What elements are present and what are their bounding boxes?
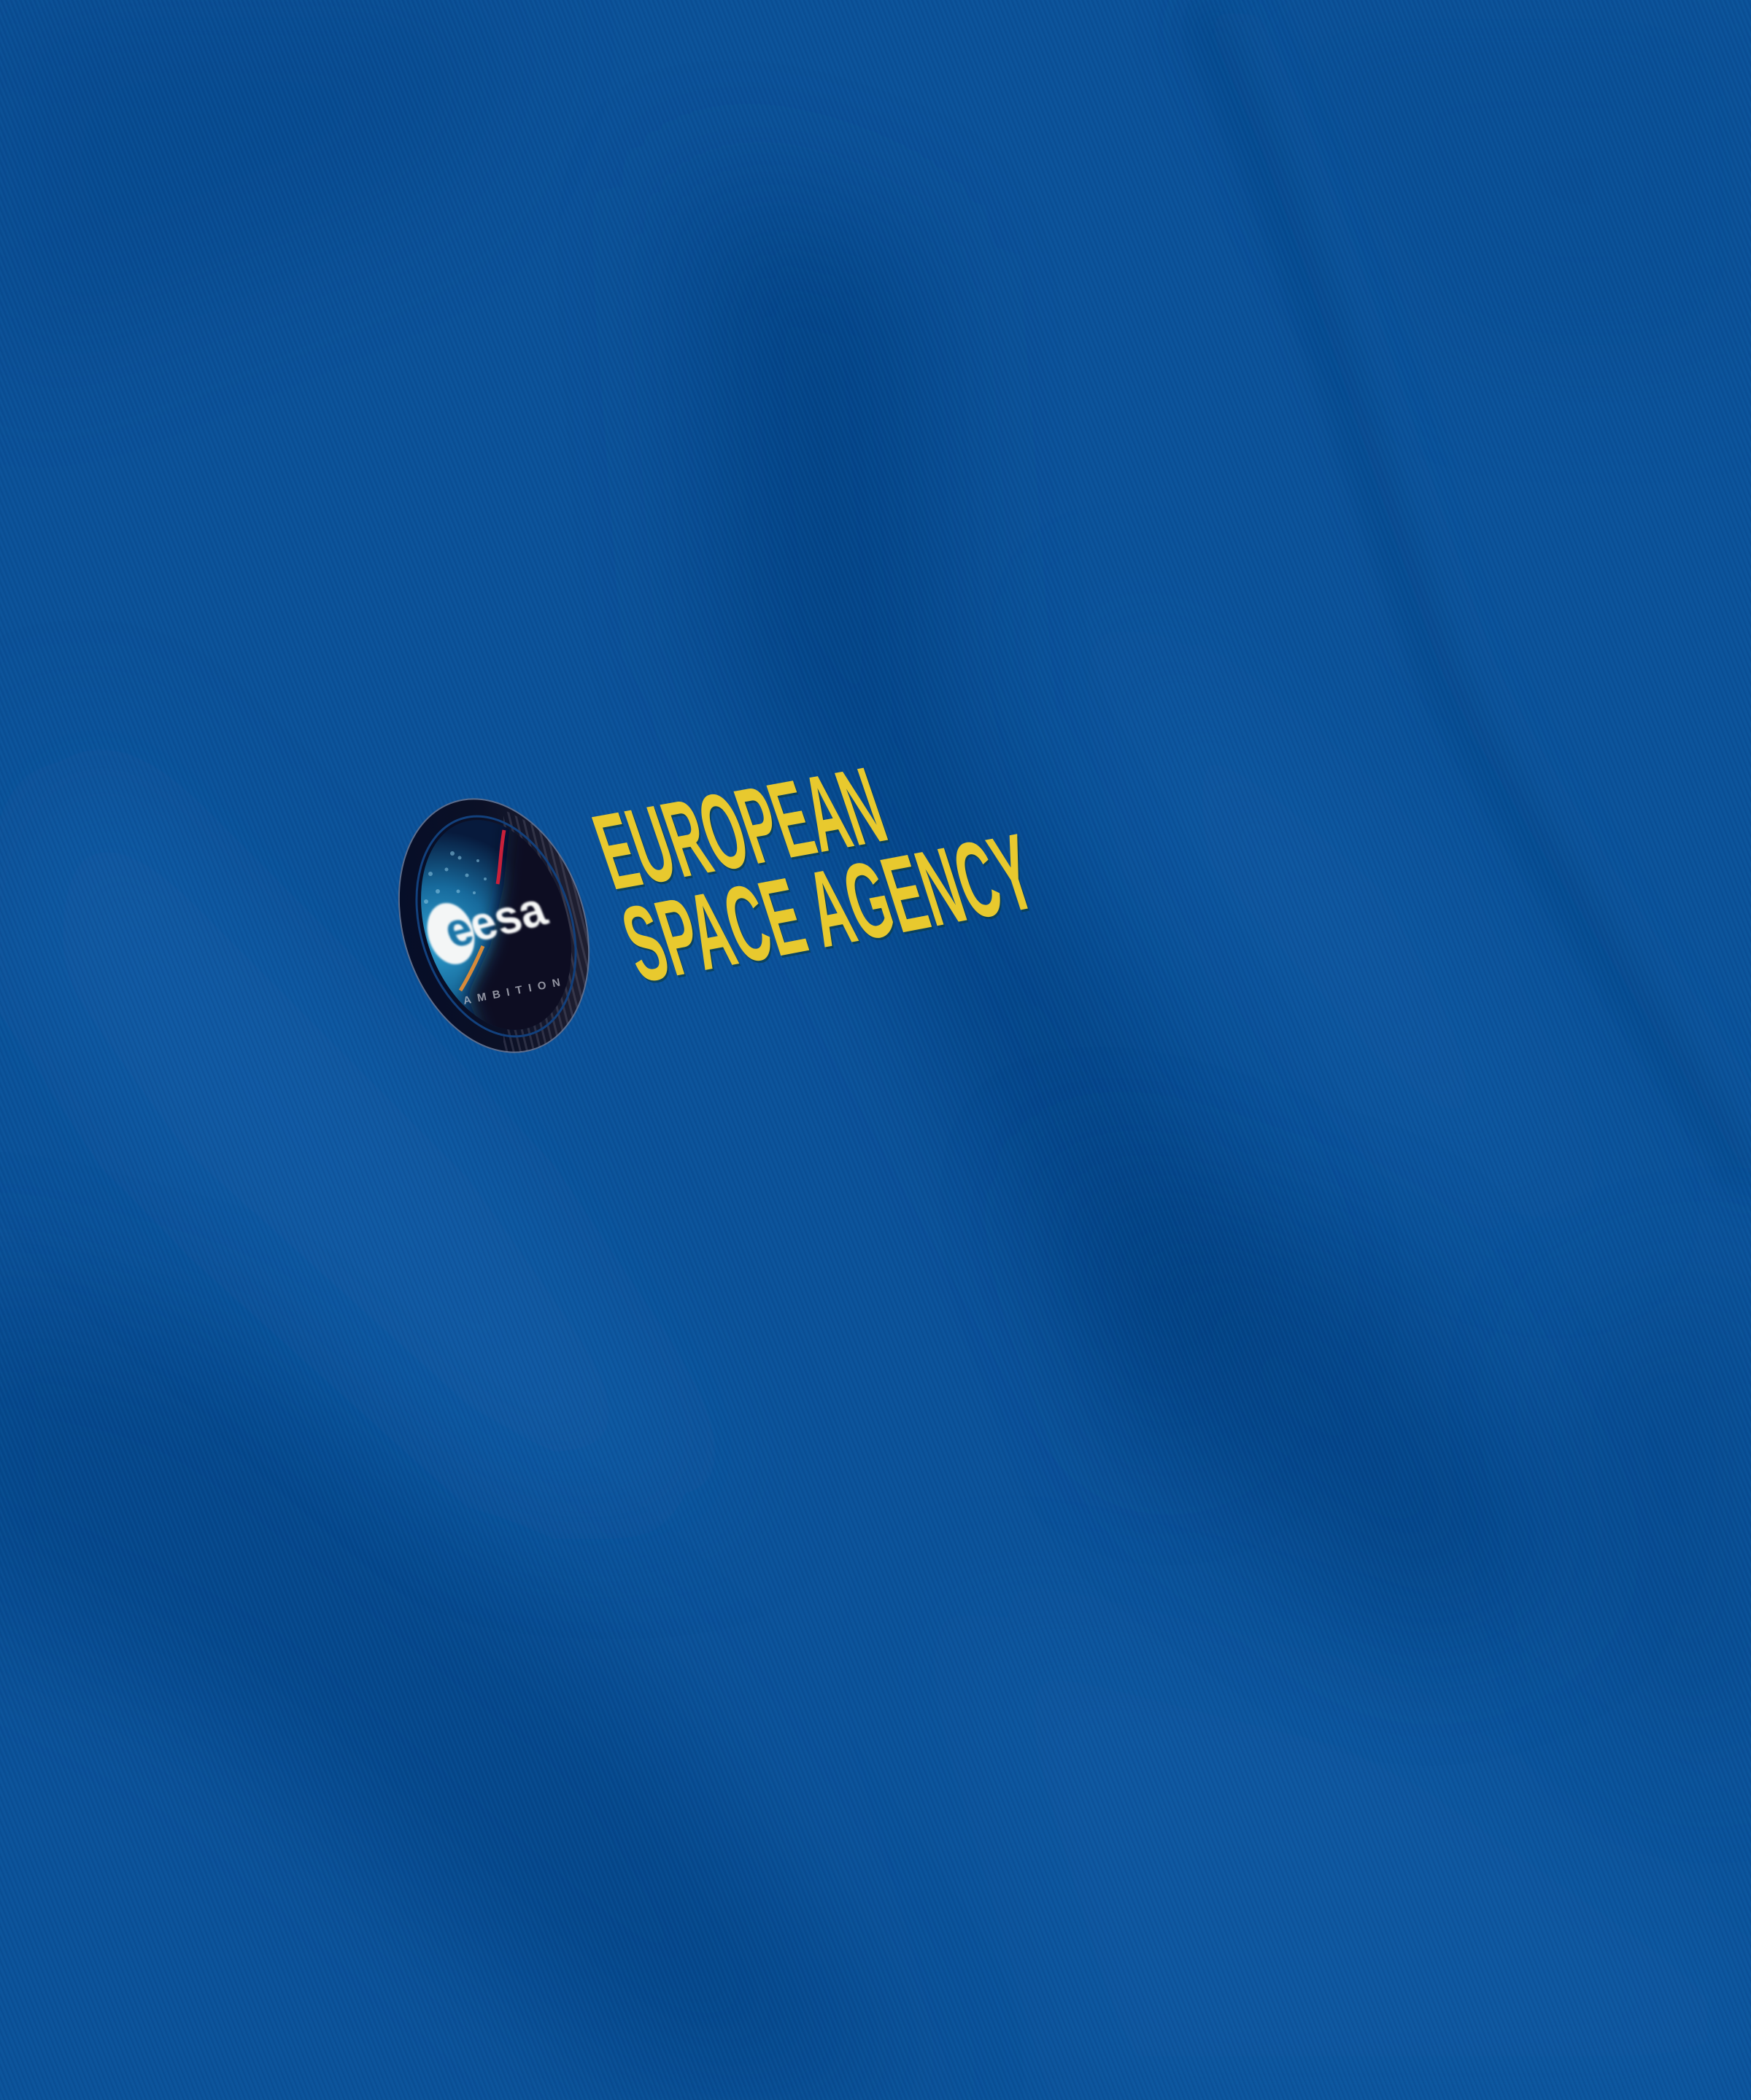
badge right-side print striping <box>503 811 589 1052</box>
sleeve seam <box>1211 22 1751 1167</box>
fabric folds: light ridges <box>0 584 1751 2100</box>
heading shadow: EUROPEAN <box>582 746 900 914</box>
badge white blob <box>420 897 482 970</box>
heading: European Space Agency <box>581 744 1050 1007</box>
badge earth limb <box>394 802 613 1050</box>
heading: European Space Agency: EUROPEAN <box>581 744 899 912</box>
heading shadow <box>582 746 1050 1007</box>
badge orange line <box>460 946 483 991</box>
badge red line <box>498 830 504 884</box>
badge inner ring <box>390 796 603 1057</box>
badge wordmark: esa: eesa <box>436 883 554 958</box>
badge dark space sector <box>467 817 613 1050</box>
logo: ESA round badge <box>398 798 590 1053</box>
badge small caption: AMBITION <box>463 976 561 1007</box>
photo: blue fabric with printed logo: SPACE AGENCY <box>609 811 1048 1005</box>
badge star dots <box>424 851 487 904</box>
photo: blue fabric with printed logo: SPACE AGENCY <box>611 813 1050 1007</box>
